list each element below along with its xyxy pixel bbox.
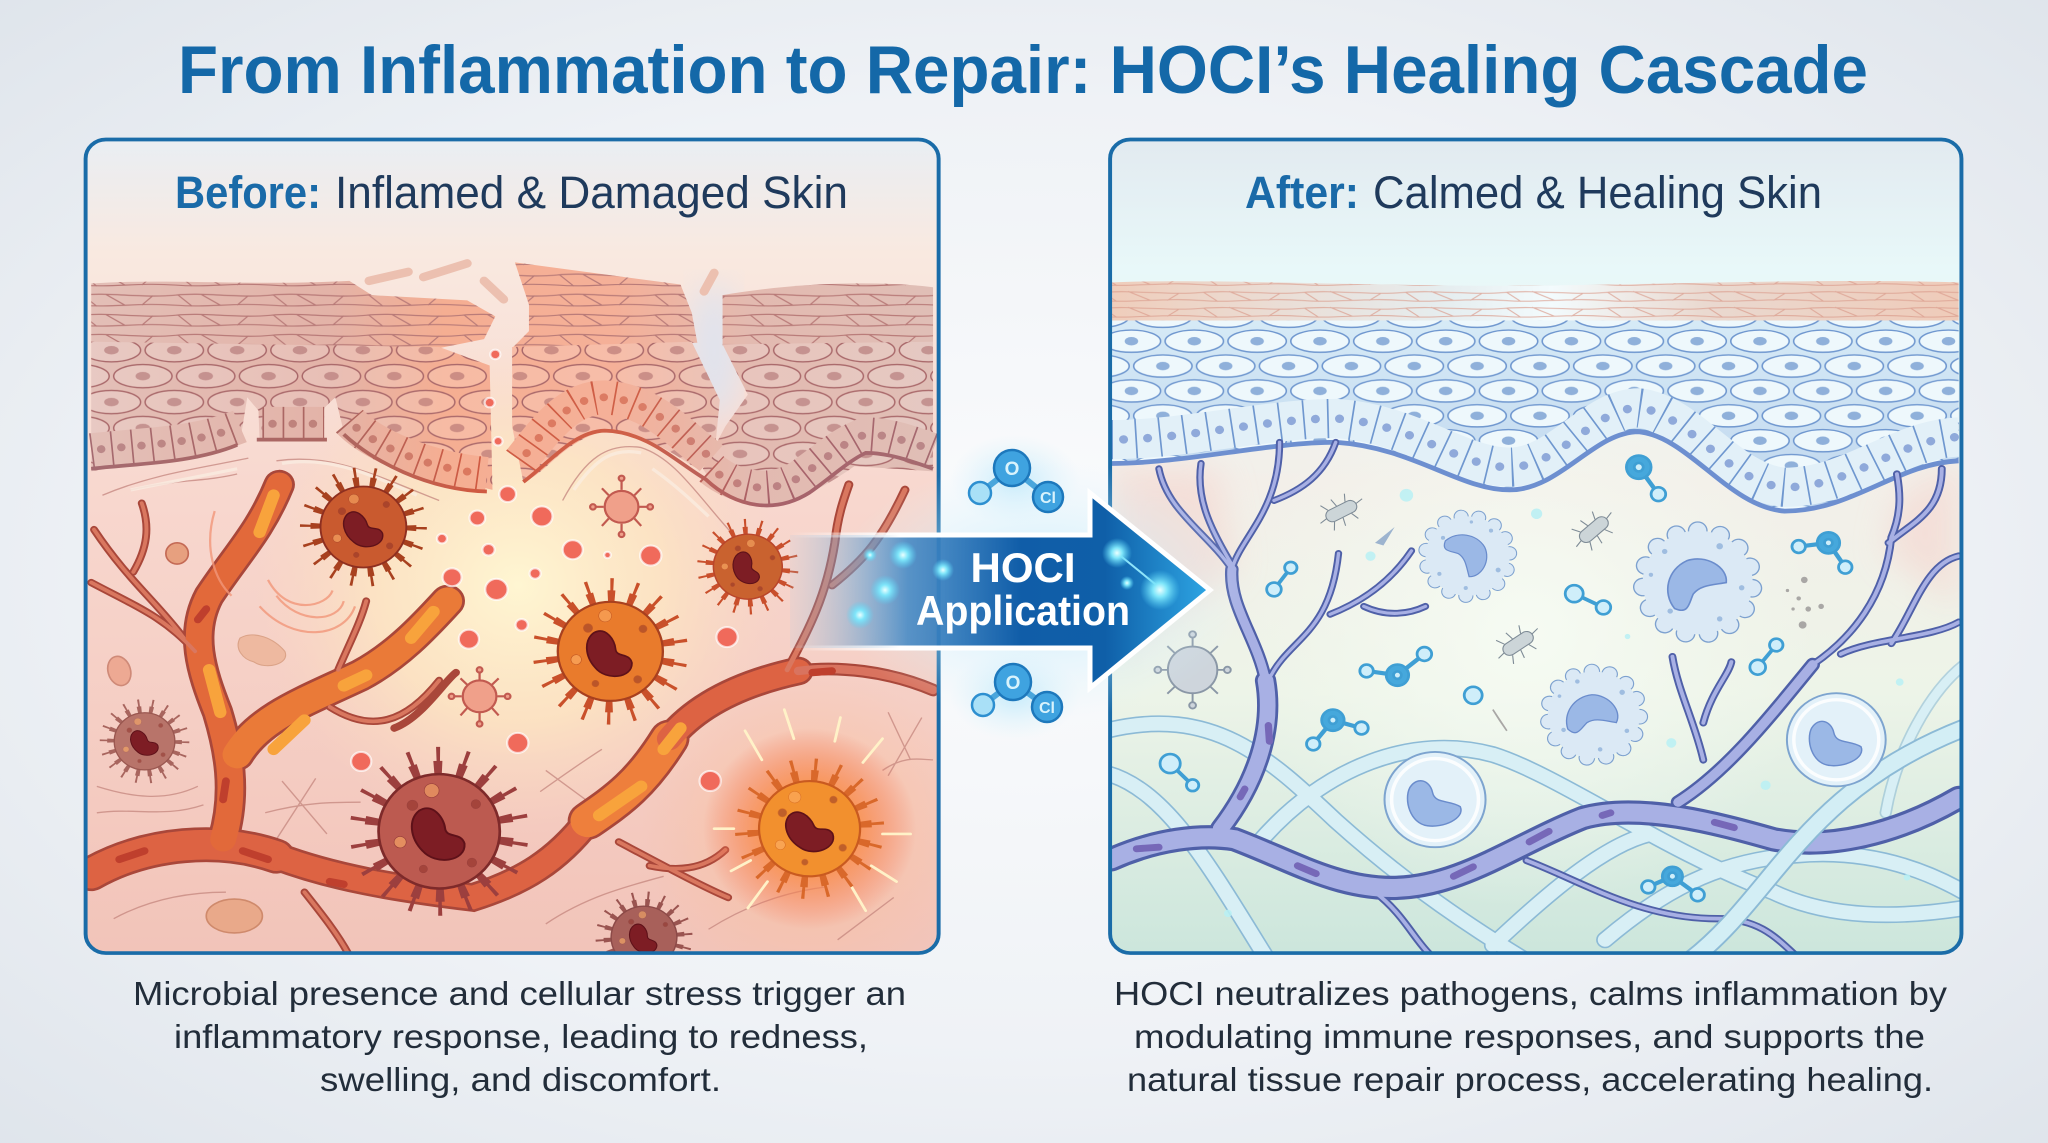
cool tint in right fissure <box>689 283 739 421</box>
basal cell row <box>1111 408 1959 511</box>
panel: before, inflamed skin <box>86 140 978 987</box>
immune cell 6 mauve <box>105 704 184 779</box>
inflammatory ripples <box>210 511 355 632</box>
icon: HOCl molecule bottom: O <box>1006 673 1020 694</box>
small tissue cells <box>104 543 286 933</box>
basal cell row <box>91 397 933 505</box>
panel border <box>86 140 939 953</box>
caption: after: natural tissue repair process, accelerating healing. <box>1127 1061 1933 1098</box>
dermis fibres <box>97 447 933 940</box>
blood vessels <box>1111 442 1959 956</box>
icon: HOCl molecule top <box>950 435 1080 525</box>
arrow sparkles <box>846 538 1180 629</box>
red blood cell droplets <box>351 350 738 791</box>
icon: HOCl molecule bottom: Cl <box>1039 700 1055 717</box>
caption: before: swelling, and discomfort. <box>320 1061 721 1098</box>
spinous cell layers <box>91 342 933 504</box>
neutralized bacteria <box>1312 487 1623 670</box>
heading: before: Before: <box>175 167 321 218</box>
neutralized virus <box>1154 631 1231 709</box>
resting cell bubble right <box>1787 693 1886 786</box>
HOCl molecules <box>1160 456 1852 901</box>
vessel outlines <box>91 485 933 956</box>
illustration: damaged epidermis <box>91 262 933 505</box>
heading: after: After: <box>1245 167 1359 218</box>
arrow edge highlight <box>790 493 1210 688</box>
glowing sparkles <box>1224 489 1910 917</box>
title: From Inflammation to Repair: HOCI’s Healing Cascade <box>178 32 1868 108</box>
arrow label: HOCI <box>970 544 1076 591</box>
vessel highlights <box>119 495 832 884</box>
vessel lumens <box>1111 442 1959 956</box>
caption: before: inflammatory response, leading to redness, <box>174 1018 868 1055</box>
calmed immune cell 3 <box>1535 659 1653 771</box>
pink dermis edges <box>1112 466 1960 593</box>
epidermis <box>1111 281 1959 511</box>
debris fragments <box>1375 527 1824 731</box>
fibre crossing over vessel <box>1689 728 1964 961</box>
heading: after: Calmed & Healing Skin <box>1373 167 1822 218</box>
immune cell 3 <box>531 576 690 727</box>
arrow label: Application <box>916 587 1130 634</box>
panel: after, calmed skin <box>1106 140 1964 961</box>
stratum corneum <box>1111 281 1959 327</box>
immune cell 7 mauve <box>596 892 692 952</box>
immune cell 5 glowing <box>703 710 916 929</box>
heading: before: Inflamed & Damaged Skin <box>335 167 848 218</box>
vessel red cells <box>1136 725 1734 876</box>
caption: after: HOCI neutralizes pathogens, calms inflammation by <box>1114 975 1948 1012</box>
immune cell 2 <box>697 518 798 614</box>
vessel outlines <box>1111 442 1959 956</box>
icon: HOCl molecule top: Cl <box>1040 490 1056 507</box>
vessel lumens <box>91 485 933 956</box>
connective tissue fibres <box>1106 665 1964 961</box>
immune cell 1 <box>307 474 420 580</box>
icon: HOCl molecule top: O <box>1005 459 1019 480</box>
immune cell 4 <box>349 747 529 916</box>
blood vessels <box>91 485 933 956</box>
arrow shape <box>790 493 1210 688</box>
calmed immune cell 2 <box>1643 531 1753 634</box>
panel border <box>1110 140 1961 953</box>
stratum corneum flakes <box>91 262 933 348</box>
caption: after: modulating immune responses, and supports the <box>1134 1018 1925 1055</box>
virus particles <box>449 476 653 727</box>
spinous cell layer <box>1111 321 1959 511</box>
caption: before: Microbial presence and cellular stress trigger an <box>133 975 906 1012</box>
calmed immune cell 1 <box>1423 514 1513 598</box>
resting cell bubble left <box>1385 752 1486 847</box>
arrow: HOCI application <box>790 460 1250 720</box>
icon: HOCl molecule bottom <box>950 650 1080 740</box>
